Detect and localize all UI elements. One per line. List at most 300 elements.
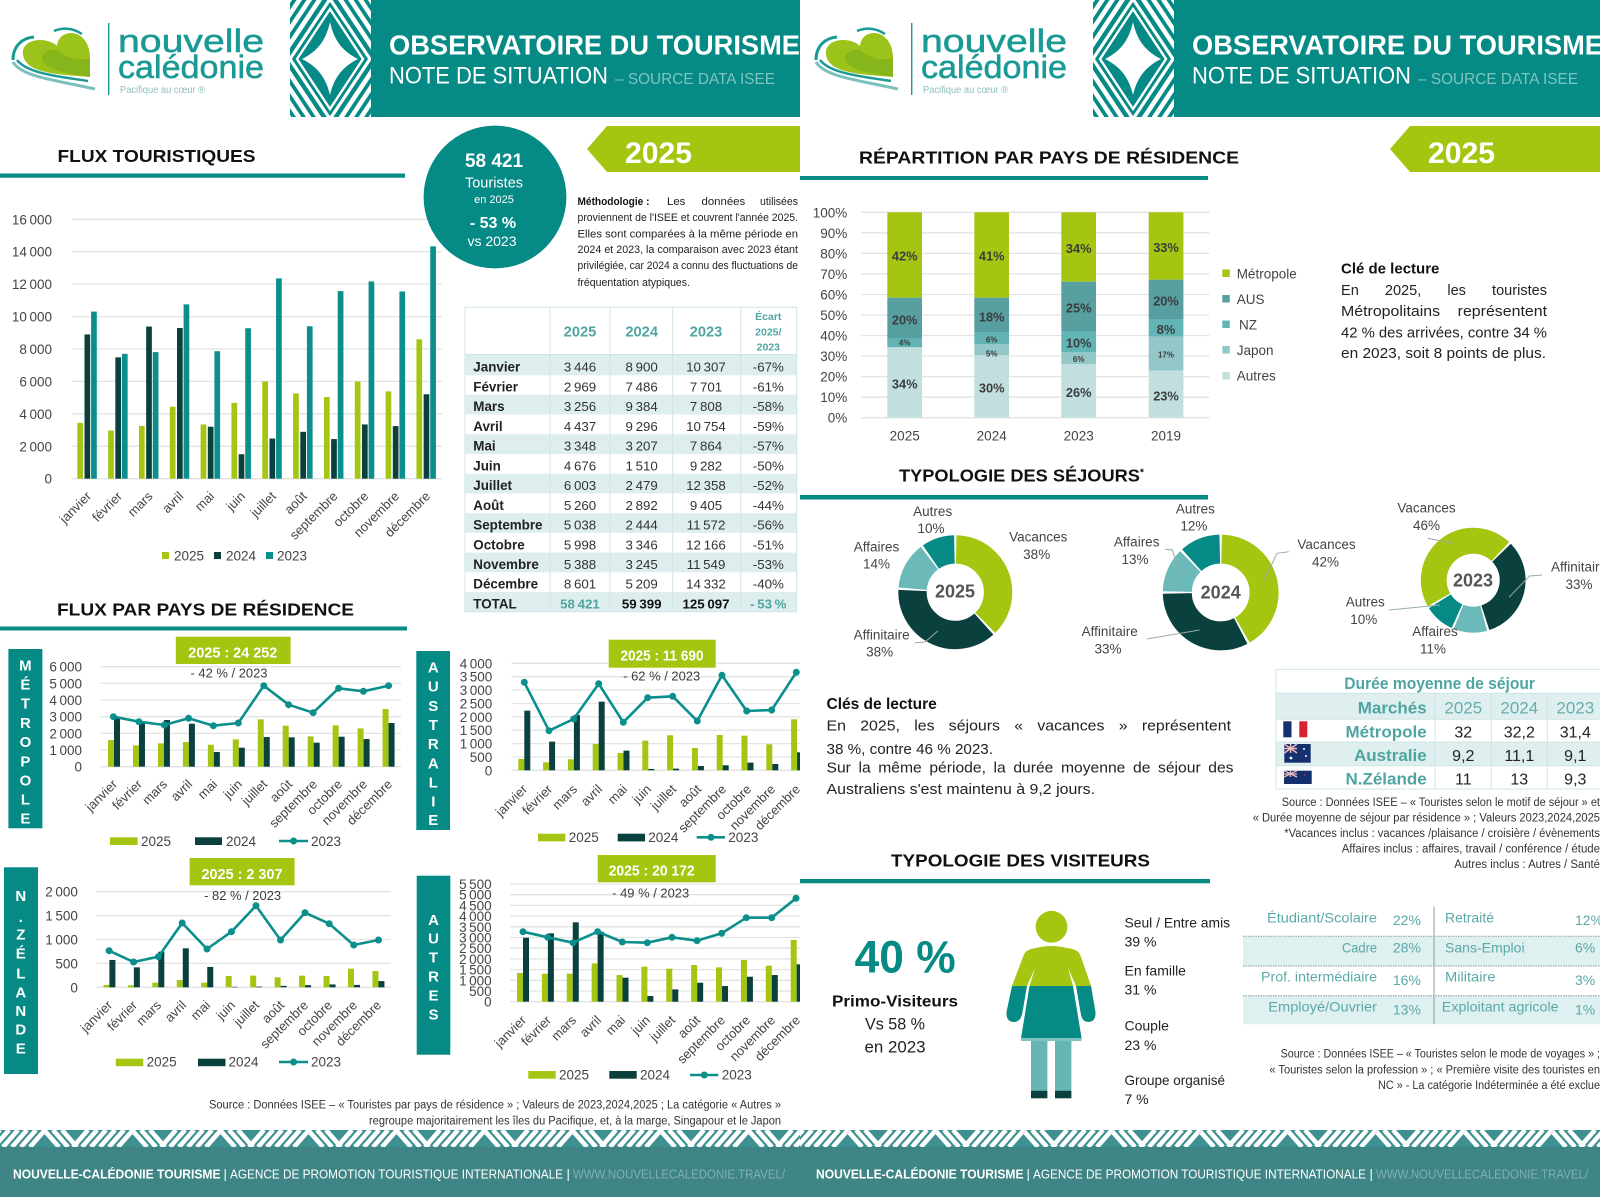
table: flux mensuels: Juin (473, 458, 501, 473)
panel: metropole: mai (195, 776, 220, 802)
panel: nouvelle-zelande: 0 (70, 980, 78, 995)
stacked bar chart: repartition: 50% (820, 308, 847, 323)
panel: autres: septembre (674, 1013, 728, 1067)
panel: metropole: mars (139, 776, 170, 808)
bar chart: flux touristiques: août (281, 488, 310, 517)
header banner: NOTE DE SITUATION (389, 62, 608, 90)
table: flux mensuels: Septembre (473, 518, 543, 532)
table: flux mensuels: 4 437 (564, 419, 596, 434)
callout: total touristes: - 53 % (470, 215, 516, 232)
table: duree moyenne de sejour: 11,1 (1504, 748, 1534, 765)
panel: nouvelle-zelande: avril (162, 997, 189, 1025)
panel: nouvelle-zelande: 2 000 (45, 885, 78, 900)
table: duree moyenne de sejour: N.Zélande (1345, 769, 1427, 788)
table: duree moyenne de sejour: 2023 (1556, 698, 1594, 717)
panel: australie: novembre (727, 782, 778, 833)
heading: typologie des visiteurs: TYPOLOGIE DES VISITEURS (891, 850, 1150, 870)
table: flux mensuels: 7 486 (626, 379, 658, 394)
panel: autres: 3 000 (459, 930, 492, 946)
panel: autres: 4 500 (459, 898, 492, 913)
table: flux mensuels: Mai (473, 439, 496, 454)
panel: metropole: 3 000 (49, 710, 82, 725)
panel: australie: 1 000 (460, 737, 492, 752)
stat: primo-visiteurs: Vs 58 % (865, 1014, 925, 1033)
stacked bar chart: repartition: 6% (986, 336, 997, 345)
callout: total touristes: vs 2023 (467, 233, 517, 249)
stacked bar chart: repartition: 6% (1073, 355, 1084, 364)
donut chart: 2023: Affaires (1412, 624, 1458, 639)
year tag: 2025 (1428, 137, 1495, 170)
bar chart: flux touristiques: 2025 (174, 548, 204, 564)
table: flux mensuels: 9 405 (690, 498, 722, 513)
footer: | (1026, 1166, 1030, 1181)
source note: Source : Données ISEE – « Touristes par pays de résidence » ; Valeurs de 2023,2024,2025 ; La catégorie « Autres » (209, 1099, 781, 1111)
panel: autres: janvier (491, 1012, 530, 1051)
panel: metropole: février (109, 776, 146, 813)
stacked bar chart: repartition: 90% (820, 226, 847, 241)
panel: australie: 0 (485, 763, 492, 778)
panel: australie: 2025 : 11 690 (620, 649, 704, 665)
stacked bar chart: repartition: 41% (979, 249, 1005, 264)
footer: | (1370, 1166, 1373, 1181)
table: flux mensuels: 3 245 (626, 557, 658, 572)
table: flux mensuels: 125 097 (682, 596, 730, 611)
logo: Pacifique au cœur ® (120, 85, 206, 96)
panel: metropole: 2023 (311, 834, 341, 849)
stacked bar chart: repartition: 100% (813, 205, 847, 220)
table: flux mensuels: -59% (753, 419, 784, 434)
donut chart: 2023: 2023 (1453, 571, 1493, 591)
donut chart: 2024: Vacances (1297, 537, 1356, 552)
panel: australie: 2 000 (460, 710, 492, 725)
donut chart: 2024: Affinitaire (1082, 624, 1138, 639)
stacked bar chart: repartition: 60% (820, 288, 847, 302)
stacked bar chart: repartition: 26% (1066, 385, 1092, 400)
table: flux mensuels: 7 701 (690, 379, 722, 394)
panel: autres: 1 500 (459, 963, 492, 978)
list: mode de voyage: 31 % (1124, 981, 1156, 997)
panel: nouvelle-zelande: février (104, 997, 141, 1034)
table: professions: 1% (1575, 1002, 1595, 1018)
text: methodologie: données (702, 196, 746, 208)
bar chart: flux touristiques: février (89, 488, 126, 525)
panel: metropole: 1 000 (49, 743, 82, 758)
bar chart: flux touristiques: 14 000 (12, 245, 52, 260)
text: cle de lecture: en 2023, soit 8 points de plus. (1341, 346, 1546, 362)
table: flux mensuels: - 53 % (750, 596, 787, 611)
source note: sejours: Affaires inclus : affaires, travail / conférence / étude (1342, 843, 1600, 855)
table: flux mensuels: Décembre (473, 577, 538, 592)
table: flux mensuels: Août (473, 498, 504, 513)
donut chart: 2025: 38% (866, 645, 893, 660)
panel: australie: 3 500 (460, 670, 492, 685)
table: flux mensuels: 2 892 (626, 498, 658, 513)
donut chart: 2025: 10% (917, 521, 945, 536)
table: flux mensuels: 2023 (690, 325, 722, 341)
year tag: 2025 (625, 137, 692, 170)
bar chart: flux touristiques: 4 000 (19, 407, 52, 422)
donut chart: 2025 (854, 504, 1068, 660)
bar chart: flux touristiques: mars (125, 488, 156, 520)
left page (0, 0, 800, 1197)
bar chart: flux touristiques: juin (222, 489, 248, 514)
panel: nouvelle-zelande: novembre (309, 998, 360, 1049)
panel: australie: E (428, 812, 438, 829)
panel: metropole: décembre (344, 777, 395, 828)
panel: metropole: 0 (74, 760, 82, 775)
table: professions: Employé/Ouvrier (1268, 998, 1377, 1014)
heading: flux par pays: FLUX PAR PAYS DE RÉSIDENCE (57, 598, 354, 620)
heading: typologie des visiteurs (800, 850, 1210, 883)
table: flux mensuels: Mars (473, 399, 505, 414)
panel: metropole: octobre (304, 777, 345, 818)
table: professions: 3% (1575, 972, 1595, 988)
bar chart: flux touristiques: septembre (286, 489, 341, 543)
bar chart: flux touristiques: 2 000 (19, 439, 52, 454)
text: cle de lecture: En 2025, les touristes (1341, 283, 1547, 299)
heading: flux par pays (0, 598, 407, 630)
table: professions: 13% (1393, 1002, 1421, 1018)
panel: autres: juin (627, 1013, 653, 1038)
stacked bar chart: repartition: AUS (1237, 292, 1264, 307)
icon: person (1006, 911, 1096, 1098)
source note: sejours: *Vacances inclus : vacances /plaisance / croisière / évènements (1284, 828, 1600, 840)
table: flux mensuels: 10 307 (686, 360, 726, 375)
logo: Pacifique au cœur ® (923, 85, 1009, 96)
panel: nouvelle-zelande: août (259, 997, 287, 1026)
panel: metropole: R (20, 715, 31, 732)
table: professions: 6% (1575, 939, 1595, 955)
panel: australie: mars (549, 781, 580, 813)
stacked bar chart: repartition: 70% (820, 267, 847, 282)
panel: australie: août (676, 781, 704, 810)
stacked bar chart: repartition: 10% (820, 390, 847, 405)
stacked bar chart: repartition: 4% (899, 338, 910, 347)
panel: australie: 4 000 (460, 656, 492, 671)
table: flux mensuels: 11 549 (687, 557, 725, 572)
donut chart: 2023: Vacances (1397, 501, 1456, 516)
panel: metropole (8, 637, 401, 849)
table: duree moyenne de sejour: 32 (1454, 725, 1472, 742)
bar chart: flux touristiques: 10 000 (12, 310, 52, 325)
heading: repartition (800, 146, 1239, 180)
text: methodologie: utilisées (760, 196, 798, 208)
panel: autres: juillet (646, 1012, 678, 1045)
panel: nouvelle-zelande: septembre (257, 998, 311, 1052)
donut chart: 2024: Autres (1176, 501, 1215, 516)
table: flux mensuels: TOTAL (473, 596, 517, 611)
table: flux mensuels: 5 260 (564, 498, 596, 513)
stacked bar chart: repartition: 8% (1157, 322, 1176, 337)
stacked bar chart: repartition: 42% (892, 249, 918, 264)
stat: primo-visiteurs: 40 % (855, 932, 956, 982)
stacked bar chart: repartition: 2023 (1064, 429, 1094, 444)
table: flux mensuels: 4 676 (564, 458, 596, 473)
panel: australie: 2025 (569, 830, 599, 845)
panel: autres: octobre (712, 1013, 753, 1054)
donut chart: 2023: 33% (1565, 577, 1593, 592)
panel: australie (416, 640, 803, 845)
table: flux mensuels: Octobre (473, 537, 525, 552)
list: mode de voyage: 7 % (1124, 1091, 1149, 1107)
stat: primo-visiteurs: Primo-Visiteurs (832, 994, 958, 1011)
source note: regroupe majoritairement les îles du Pacifique, et, à la marge, Singapour et le Japon (369, 1115, 781, 1127)
panel: metropole: juin (219, 777, 245, 802)
table: flux mensuels: 10 754 (686, 419, 726, 434)
panel: nouvelle-zelande: É (16, 945, 26, 962)
panel: autres: 3 500 (459, 920, 492, 935)
bar chart: flux touristiques: mai (192, 488, 217, 514)
panel: australie: I (431, 793, 435, 810)
table: professions: Cadre (1342, 939, 1377, 955)
panel: nouvelle-zelande: 2025 : 2 307 (202, 867, 282, 883)
panel: nouvelle-zelande: octobre (294, 998, 335, 1039)
table: flux mensuels: 11 572 (687, 518, 725, 532)
panel: autres: 0 (484, 995, 492, 1010)
panel: australie: juillet (647, 781, 679, 814)
table: duree moyenne de sejour: Australie (1354, 746, 1427, 765)
panel: autres: 5 500 (459, 877, 492, 892)
text: cles de lecture: Sur la même période, la durée moyenne de séjour des (826, 761, 1234, 777)
donut chart: 2024: 42% (1312, 554, 1339, 569)
table: duree moyenne de sejour: 32,2 (1504, 725, 1535, 742)
panel: autres: - 49 % / 2023 (612, 887, 689, 901)
callout: total touristes: en 2025 (474, 194, 514, 206)
table: flux mensuels: Novembre (473, 557, 539, 572)
panel: australie: octobre (713, 782, 754, 823)
table: flux mensuels: -61% (753, 379, 784, 394)
panel: nouvelle-zelande: D (15, 1021, 26, 1038)
logo: nouvelle (921, 23, 1067, 59)
donut chart: 2024: 33% (1094, 641, 1122, 656)
table: duree moyenne de sejour: 9,1 (1564, 748, 1587, 765)
donut chart: 2023: 11% (1420, 641, 1446, 656)
panel: australie: 500 (470, 750, 492, 765)
panel: metropole: É (20, 676, 30, 693)
panel: metropole: novembre (319, 777, 370, 828)
table: flux mensuels: 2023 (757, 341, 780, 353)
heading: typologie des sejours (800, 465, 1208, 500)
donut chart: 2023: Autres (1346, 595, 1385, 610)
panel: metropole: 6 000 (49, 660, 82, 675)
donut chart: 2025: 14% (863, 556, 890, 571)
panel: australie: 2 500 (460, 696, 492, 712)
panel: australie: 1 500 (460, 723, 492, 738)
panel: nouvelle-zelande (4, 858, 391, 1074)
table: flux mensuels: 3 207 (626, 439, 658, 454)
panel: autres: mars (548, 1012, 579, 1044)
panel: metropole: 2 000 (49, 726, 82, 741)
panel: metropole: M (19, 657, 32, 674)
table: flux mensuels: -56% (753, 518, 784, 532)
stacked bar chart: repartition: 34% (892, 377, 918, 392)
panel: nouvelle-zelande: 1 000 (45, 932, 78, 948)
table: flux mensuels: 2 444 (626, 518, 658, 532)
stacked bar chart: repartition: 20% (820, 370, 847, 385)
footer: NOUVELLE-CALÉDONIE TOURISME (13, 1166, 221, 1181)
stacked bar chart: repartition: Métropole (1237, 266, 1297, 281)
text: cle de lecture: Métropolitains représentent (1341, 304, 1547, 320)
donut chart: 2023: 46% (1413, 518, 1440, 533)
stacked bar chart: repartition: 30% (979, 380, 1005, 395)
table: flux mensuels: 58 421 (560, 596, 600, 611)
source note: sejours: Autres inclus : Autres / Santé (1454, 859, 1600, 871)
stacked bar chart: repartition: Autres (1237, 369, 1276, 384)
bar chart: flux touristiques: 16 000 (12, 212, 52, 227)
table: flux mensuels: 12 358 (686, 478, 726, 493)
panel: australie: U (428, 679, 439, 696)
table: flux mensuels: 59 399 (622, 596, 662, 611)
text: cles de lecture: Australiens s'est maintenu à 9,2 jours. (826, 782, 1095, 798)
bar chart: flux touristiques: juillet (247, 488, 279, 521)
panel: metropole: janvier (82, 776, 121, 815)
panel: nouvelle-zelande: . (19, 909, 23, 926)
table: flux mensuels: 5 998 (564, 537, 596, 552)
panel: metropole: avril (168, 776, 195, 804)
logo: nouvelle (118, 23, 264, 59)
stat: primo-visiteurs: en 2023 (864, 1038, 926, 1057)
panel: nouvelle-zelande: mars (133, 997, 164, 1029)
stacked bar chart: repartition: 34% (1066, 241, 1092, 256)
stacked bar chart: repartition: 25% (1066, 301, 1092, 316)
list: mode de voyage: Couple (1124, 1018, 1169, 1034)
heading: flux touristiques: FLUX TOURISTIQUES (58, 146, 256, 166)
table: flux mensuels: Février (473, 379, 519, 394)
table: flux mensuels: 7 808 (690, 399, 722, 414)
table: duree moyenne de sejour: 9,3 (1564, 771, 1587, 788)
panel: metropole: L (21, 791, 30, 808)
bar chart: flux touristiques: avril (159, 488, 186, 516)
bar chart: flux touristiques: 2023 (277, 548, 307, 564)
bar chart: flux touristiques: 2024 (226, 548, 257, 564)
panel: nouvelle-zelande: L (16, 965, 25, 982)
table: flux mensuels: -50% (753, 458, 784, 473)
bar chart: flux touristiques: 0 (44, 472, 52, 487)
logo (816, 23, 1067, 96)
list: mode de voyage: Seul / Entre amis (1124, 915, 1230, 931)
donut chart: 2024 (1082, 501, 1356, 656)
panel: australie: juin (628, 782, 654, 807)
bar chart: flux touristiques (12, 212, 442, 564)
stacked bar chart: repartition: 0% (828, 411, 847, 426)
panel: autres: août (675, 1012, 703, 1041)
panel: australie: 2024 (648, 830, 679, 845)
stat: primo-visiteurs (832, 932, 958, 1057)
panel: australie: avril (578, 781, 605, 809)
table: flux mensuels: 3 446 (564, 360, 596, 375)
header banner: NOTE DE SITUATION (1192, 62, 1411, 90)
donut chart: 2024: 12% (1180, 519, 1207, 534)
table: duree moyenne de sejour: 13 (1510, 771, 1528, 788)
year tag (1390, 126, 1600, 172)
table: professions: 22% (1393, 912, 1421, 928)
text: methodologie: fréquentation atypiques. (578, 277, 690, 289)
donut chart: 2025: Affinitaire (854, 627, 910, 642)
header banner: – SOURCE DATA ISEE (1418, 71, 1578, 88)
table: flux mensuels (465, 307, 797, 612)
panel: australie: L (429, 774, 438, 791)
panel: nouvelle-zelande: E (16, 1040, 26, 1057)
panel: autres: 4 000 (459, 909, 492, 924)
footer: AGENCE DE PROMOTION TOURISTIQUE INTERNATIONALE (1033, 1166, 1366, 1181)
table: flux mensuels: 3 348 (564, 439, 596, 454)
table: professions (1243, 907, 1600, 1024)
panel: metropole: juillet (238, 776, 270, 809)
table: flux mensuels: -57% (753, 439, 784, 454)
list: mode de voyage (1124, 915, 1230, 1107)
heading: typologie des sejours: TYPOLOGIE DES SÉJOURS (899, 466, 1130, 486)
panel: nouvelle-zelande: N (15, 1003, 26, 1020)
panel: australie: février (519, 781, 556, 818)
panel: metropole: O (20, 772, 32, 789)
text: cle de lecture: Clé de lecture (1341, 260, 1439, 278)
heading: typologie des sejours: * (1140, 468, 1144, 479)
table: flux mensuels: 2 479 (626, 478, 658, 493)
panel: metropole: septembre (266, 777, 320, 831)
table: flux mensuels: 9 384 (626, 399, 658, 414)
logo (13, 23, 264, 96)
panel: australie: A (428, 755, 439, 772)
table: duree moyenne de sejour: Métropole (1345, 722, 1427, 741)
table: duree moyenne de sejour (1276, 669, 1600, 789)
panel: australie: T (429, 717, 438, 734)
panel: autres: février (518, 1012, 555, 1049)
table: flux mensuels: 8 900 (626, 360, 658, 375)
panel: autres (417, 855, 803, 1082)
source note: visiteurs (1269, 1049, 1600, 1092)
table: flux mensuels: 9 296 (626, 419, 658, 434)
panel: metropole: 2025 (141, 834, 171, 849)
heading: repartition: RÉPARTITION PAR PAYS DE RÉSIDENCE (859, 146, 1239, 168)
panel: autres: novembre (727, 1013, 778, 1064)
bar chart: flux touristiques: janvier (56, 488, 95, 527)
donut chart: 2025: Autres (913, 504, 952, 519)
panel: nouvelle-zelande: mai (188, 997, 213, 1023)
panel: autres: 2 500 (459, 941, 492, 956)
panel: nouvelle-zelande: 2023 (311, 1055, 341, 1070)
panel: australie: S (428, 698, 438, 715)
panel: nouvelle-zelande: janvier (77, 997, 116, 1036)
panel: autres: 500 (469, 984, 492, 999)
panel: autres: 1 000 (459, 973, 492, 988)
stacked bar chart: repartition: 10% (1066, 336, 1092, 351)
panel: autres: 2023 (722, 1067, 752, 1082)
panel: nouvelle-zelande: 2025 (147, 1055, 177, 1070)
text: cle de lecture (1341, 260, 1547, 362)
donut chart: 2025: Vacances (1009, 530, 1068, 545)
list: mode de voyage: 23 % (1124, 1037, 1156, 1053)
donut chart: 2024: 13% (1121, 552, 1149, 567)
stacked bar chart: repartition: 20% (1153, 293, 1179, 308)
donut chart: 2025: Affaires (854, 539, 900, 554)
list: mode de voyage: 39 % (1124, 934, 1156, 950)
panel: nouvelle-zelande: 1 500 (45, 909, 78, 924)
panel: australie: janvier (492, 781, 531, 820)
table: professions: Étudiant/Scolaire (1267, 909, 1377, 925)
panel: autres: avril (577, 1012, 604, 1040)
table: flux mensuels: 2 969 (564, 379, 596, 394)
table: flux mensuels: 9 282 (690, 458, 722, 473)
panel: metropole: T (21, 696, 30, 713)
panel: australie: septembre (675, 782, 729, 836)
panel: australie: mai (605, 781, 630, 807)
header banner (290, 0, 800, 117)
source note: sejours (1253, 797, 1600, 871)
panel: metropole: août (267, 776, 295, 805)
stacked bar chart: repartition: 2024 (977, 429, 1007, 444)
table: duree moyenne de sejour: Durée moyenne de séjour (1344, 674, 1535, 693)
bar chart: flux touristiques: octobre (330, 489, 371, 530)
